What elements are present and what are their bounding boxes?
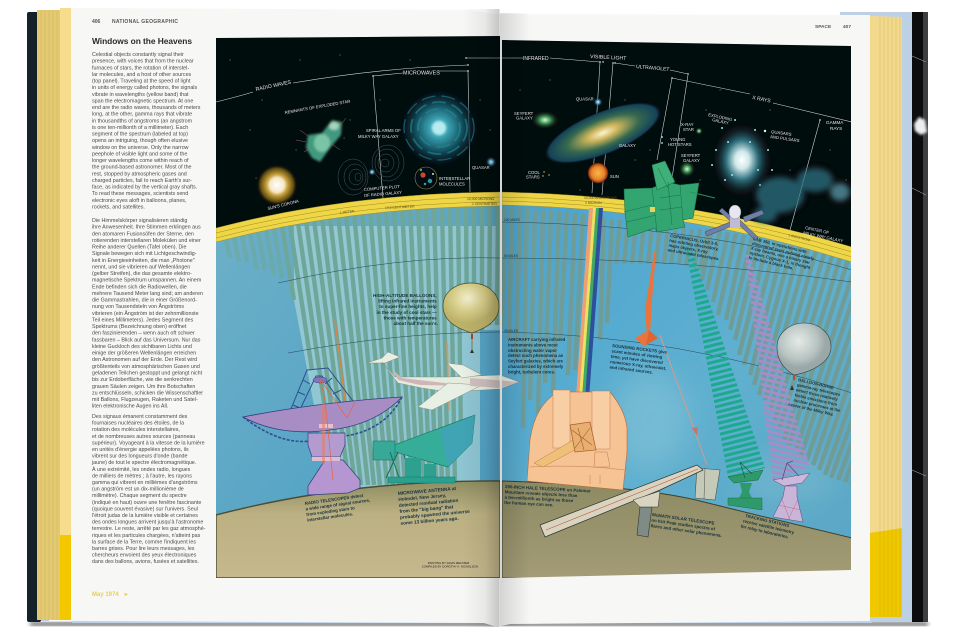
x-ray star — [681, 123, 702, 134]
body text French: terrestre. Le reste, arrêté par les gaz atmosphé- — [92, 526, 206, 532]
atmospheric window shafts — [226, 207, 498, 485]
aircraft caption: obstructing water vapor — [508, 348, 557, 353]
interstellar molecules — [415, 167, 470, 189]
copernicus caption: maps objects, X-ray — [668, 243, 709, 254]
young hot stars: YOUNG — [670, 137, 685, 142]
body text French: Des signaux émanent constamment des — [92, 414, 188, 420]
band scale labels: 10,000 ANGSTROMS — [584, 196, 618, 200]
body text French: des ondes longues arrivent jusqu'à l'astronome — [92, 520, 203, 526]
x-ray star: X-RAY — [681, 122, 694, 127]
hale telescope caption: Mountain reveals objects less than — [505, 489, 578, 498]
band scale labels: 1 CENTIMETER — [472, 202, 497, 206]
body text English: window on the universe. Only the narrow — [91, 145, 189, 151]
body text English: furnaces of stars, the rotation of interstel- — [92, 65, 189, 71]
body text English: rockets, and satellites. — [92, 204, 145, 210]
spectrum name labels: X RAYS — [752, 95, 772, 105]
cool stars: COOL — [528, 170, 541, 175]
body text French: rotation des molécules interstellaires, — [92, 427, 180, 433]
body text English: longer wavelengths come within reach of — [92, 158, 189, 164]
body text English: vibrate in wavelengths (yellow band) that — [92, 92, 189, 98]
body text German: ihre Anwesenheit. Ihre Stimmen erklingen aus — [92, 225, 201, 231]
body text French: (indiqué en haut) ouvre une fenêtre fascinante — [92, 500, 201, 506]
spectrum name labels: MICROWAVES — [403, 70, 440, 76]
quasars and pulsars: QUASARS — [771, 129, 792, 137]
aircraft — [367, 352, 519, 410]
spectrum labels and brackets — [216, 54, 852, 230]
bracket end dots — [373, 58, 820, 120]
sun: SUN — [610, 174, 619, 179]
altitude labels: 25 MILES — [504, 329, 518, 333]
body text English: rest, stopped by atmospheric gases and — [92, 171, 187, 177]
altitude lines — [278, 222, 852, 393]
band scale labels: 1/10 CENTIMETER — [385, 204, 415, 210]
spiral galaxy: SPIRAL ARMS OF — [366, 128, 401, 133]
band scale labels: 1 MICRON — [585, 201, 602, 205]
cool stars — [526, 171, 550, 178]
mcmath caption: McMATH SOLAR TELESCOPE — [652, 512, 715, 526]
body text English: the ground-based astronomer. Most of the — [92, 165, 192, 171]
balloon caption: about half the sun's. — [394, 321, 438, 326]
body text German: nennt, und sie vibrieren auf Wellenlängen — [92, 264, 190, 270]
band scale labels: 1 METER — [340, 209, 355, 215]
body text French: la surface de la Terre, comme l'indiquent les — [92, 539, 196, 545]
hale telescope caption: 200-INCH HALE TELESCOPE on Palomar — [505, 484, 591, 493]
running head right: 407 — [843, 24, 851, 30]
interstellar molecules: INTERSTELLAR — [439, 176, 470, 181]
quasar right — [576, 97, 602, 106]
truss frame — [290, 368, 354, 408]
sounding rockets caption: numerous X-ray, ultraviolet, — [610, 359, 667, 371]
quasar right: QUASAR — [576, 96, 594, 102]
body text English: end are the radio waves, thousands of meters — [92, 105, 201, 111]
radio telescope — [243, 320, 402, 495]
body text French: vibrent sur des longueurs d'onde (bande — [92, 454, 188, 460]
x-ray star: STAR — [683, 127, 694, 132]
body text German: (gelber Streifen), die das gesamte elektro- — [92, 271, 192, 277]
spectrum rainbow shaft — [576, 208, 603, 392]
body text English: face, as indicated by the vertical gray shafts. — [92, 185, 197, 191]
body text German: liten elektronische Augen ins All. — [92, 404, 168, 410]
green tracking station — [728, 462, 763, 510]
body text German: zu entschlüsseln, schicken die Wissenschaftler — [92, 390, 203, 396]
hale telescope caption: the human eye can see. — [504, 500, 554, 507]
body text English: Celestial objects constantly signal their — [92, 52, 184, 58]
spectrum name labels: VISIBLE LIGHT — [590, 54, 627, 62]
hale telescope dome — [527, 390, 627, 490]
balloon caption: lifting infrared instruments — [378, 299, 437, 304]
microwave antenna caption: some 13 billion years ago. — [400, 516, 459, 526]
quasars and pulsars — [764, 130, 800, 142]
balloon-borne caption: feeble emissions from — [794, 392, 838, 407]
interstellar molecules: MOLECULES — [439, 182, 465, 186]
seyfert galaxy left — [514, 111, 558, 128]
microwave antenna caption: probably spawned the universe — [400, 509, 470, 520]
balloon caption: to super-fine heights, help — [379, 304, 437, 309]
body text French: supérieur). Voyageant à la vitesse de la lumière — [92, 440, 205, 446]
green satellite Copernicus — [624, 161, 715, 237]
seyfert galaxy right: SEYFERT — [681, 153, 701, 158]
sounding rockets caption: SOUNDING ROCKETS give — [612, 343, 668, 355]
balloon caption: in the study of cool stars — — [376, 310, 437, 315]
mcmath caption: on Kitt Peak studies spectra of — [651, 518, 716, 532]
painting credit: PAINTING BY DAVIS MELTZER — [428, 561, 469, 565]
balloon caption: HIGH-ALTITUDE BALLOONS, — [373, 293, 437, 298]
body text French: gamma qui vibrent en millièmes d'angströms — [92, 480, 198, 486]
body text German: mit Ballons, Flugzeugen, Raketen und Satel- — [92, 397, 198, 403]
radio telescopes caption: a wide range of signal sources, — [305, 498, 370, 512]
seyfert galaxy right: GALAXY — [683, 158, 700, 163]
body text German: Spektrums (Bezeichnung oben) eröffnet — [92, 324, 187, 330]
aircraft caption: instruments above most — [508, 342, 558, 347]
altitude labels: 50 MILES — [504, 254, 518, 258]
aircraft caption: AIRCRAFT carrying infrared — [508, 337, 566, 342]
body text French: dans des ballons, avions, fusées et satellites. — [92, 559, 199, 565]
lab caption: system, Cygnus X-1, is thought — [749, 250, 812, 270]
band scale labels: 1 ANGSTROM — [788, 233, 810, 242]
exploding galaxy: GALAXY — [712, 117, 729, 126]
tracking stations caption: TRACKING STATIONS — [745, 513, 790, 528]
body text English: peephole of visible light and some of the — [92, 151, 187, 157]
starfield — [230, 55, 846, 190]
left page block edge — [37, 8, 72, 620]
lab caption: to include a black hole. — [748, 255, 794, 271]
radio telescopes caption: RADIO TELESCOPES detect — [304, 493, 364, 506]
sounding rockets caption: scant minutes of viewing — [611, 348, 663, 360]
body text French: et de nombreuses autres sources (panneau — [92, 434, 195, 440]
copernicus caption: COPERNICUS, Orbit 3-5, — [670, 233, 719, 246]
balloon caption: those with temperatures — [384, 315, 437, 320]
body text German: geladenen Teilchen gestoppt und gelangt nicht — [92, 370, 203, 376]
gutter shading — [462, 9, 530, 627]
body text German: Reihe anderer Quellen (Tafel oben). Die — [92, 245, 186, 251]
body text German: den Astronomen auf der Erde. Der Rest wird — [92, 357, 197, 363]
tracking stations caption: for relay to laboratories. — [740, 524, 789, 540]
body text German: den atomaren Fusionsöfen der Sterne, den — [92, 231, 194, 237]
body text German: Ende befinden sich die Radiowellen, die — [92, 284, 187, 290]
radio telescopes caption: from exploding stars to — [306, 505, 355, 517]
body text French: À une extrémité, les ondes radio, longues — [92, 466, 191, 473]
seyfert galaxy left: GALAXY — [516, 116, 533, 120]
exploding galaxy: EXPLODING — [708, 112, 733, 122]
body text German: vibrieren (ein Ångström ist der zehnmillionste — [92, 310, 199, 317]
center of milky way galaxy: CENTER OF — [805, 225, 830, 235]
computer plot of radio galaxy — [338, 145, 404, 198]
seyfert galaxy right — [679, 154, 700, 177]
band scale labels — [340, 196, 810, 242]
balloon-borne caption: center of the Milky Way. — [788, 402, 834, 417]
atmosphere sky — [216, 199, 852, 560]
folio date: May 1974 ▸ — [92, 592, 129, 598]
purple tracking station — [773, 461, 810, 522]
body text English: lar molecules, and a host of other sources — [92, 72, 192, 78]
andromeda type galaxy — [545, 102, 662, 164]
spectrum name labels: GAMMA — [826, 120, 844, 125]
exploded star remnant — [284, 99, 351, 162]
body text German: Teil eines Millimeters). Jedes Segment des — [92, 317, 194, 323]
young hot stars: HOT STARS — [668, 142, 692, 147]
body text English: in thousandths of angstroms (an angstrom — [92, 118, 193, 124]
cool stars: STARS — [526, 174, 540, 180]
body text German: bis zur Erdoberfläche, wie die senkrechten — [92, 377, 193, 383]
radio telescopes caption: interstellar molecules. — [307, 511, 353, 523]
exploding galaxy — [708, 112, 774, 200]
sun — [587, 162, 619, 184]
solar arrow — [660, 335, 707, 465]
running head left: NATIONAL GEOGRAPHIC — [112, 19, 178, 25]
mcmath solar telescope — [540, 465, 720, 537]
microwave horn antenna — [373, 415, 475, 483]
painting credit: COMPILED BY DOROTHY A. NICHOLSON — [422, 564, 478, 568]
quasars and pulsars: AND PULSARS — [770, 134, 800, 143]
aircraft caption: characterized by extremely — [508, 364, 564, 369]
body text English: span the electromagnetic spectrum. At one — [92, 98, 193, 104]
ground — [216, 481, 852, 578]
body text English: electronic eyes aloft in balloons, planes, — [92, 198, 186, 204]
body text French: jaune) de tout le spectre électromagnétique. — [91, 460, 196, 466]
body text English: is one ten-millionth of a millimeter). Each — [92, 125, 188, 131]
lab caption: discovered stars pulsing clearly — [752, 241, 815, 261]
copernicus caption: has orbiting observatory, — [669, 238, 719, 251]
body text English: opens an intriguing, though often elusive — [92, 138, 188, 144]
balloon-borne caption: gamma-ray telescopes — [797, 382, 841, 397]
body text German: fassbaren – Blick auf das Universum. Nur das — [92, 337, 201, 343]
body text German: grauen Säulen zeigen. Um ihre Botschaften — [92, 384, 195, 390]
high-altitude balloon — [373, 283, 499, 410]
spiral galaxy — [358, 90, 476, 166]
quasar left: QUASAR — [472, 165, 490, 170]
microwave antenna caption: detected residual radiation — [399, 498, 459, 508]
body text German: nung von Tausendsteln von Ångströms — [92, 303, 184, 310]
body text French: millimètre). Chaque segment du spectre — [92, 493, 187, 499]
body text French: (quoique souvent évasive) sur l'univers. Seul — [92, 506, 198, 512]
body text French: (un angström est un dix-millionième de — [92, 487, 184, 493]
sounding rockets caption: time, yet have discovered — [611, 354, 663, 365]
body text German: rotierenden interstellaren Molekülen und einer — [92, 238, 201, 244]
arrowhead — [692, 427, 698, 436]
body text English: To read these messages, scientists send — [92, 191, 188, 197]
body text German: größtenteils von atmosphärischen Gasen und — [92, 364, 200, 370]
running head right: SPACE — [815, 25, 831, 30]
cover artwork fragment — [912, 56, 926, 476]
body text French: riques et les particules chargées, n'atteint pas — [92, 533, 201, 539]
copernicus caption: and ultraviolet telescopes. — [667, 247, 720, 261]
spectrum name labels: RADIO WAVES — [255, 79, 292, 93]
lab caption: LAB 350, in operations with — [753, 236, 808, 254]
center of milky way galaxy — [753, 168, 850, 243]
right page block edge — [870, 16, 902, 617]
body text French: fournaises nucléaires des étoiles, de la — [92, 421, 184, 427]
computer plot of radio galaxy: COMPUTER PLOT — [364, 184, 400, 192]
balloon-borne caption: nuclear processes at the — [793, 397, 842, 413]
body text German: magnetische Spektrum umspannen. An einem — [92, 278, 202, 284]
exploded star remnant: REMNANTS OF EXPLODED STAR — [284, 99, 351, 115]
microwave antenna caption: from the "big bang" that — [399, 504, 454, 514]
body text German: kleine Guckloch des sichtbaren Lichts und — [92, 344, 192, 350]
hale telescope caption: a ten-millionth as bright as those — [504, 495, 574, 503]
young hot stars — [662, 137, 692, 147]
teal telemetry beam — [686, 250, 765, 477]
andromeda type galaxy: GALAXY — [619, 143, 636, 148]
microwave antenna caption: MICROWAVE ANTENNA at — [398, 486, 457, 496]
tracking stations caption: receive satellite telemetry — [743, 518, 795, 535]
body text English: presence, with voices that from the nuclear — [92, 59, 194, 65]
altitude labels: 100 MILES — [504, 218, 520, 222]
body text English: charged particles, fail to reach Earth's sur- — [92, 178, 192, 184]
body text English: long, at the other, gamma rays that vibrate — [92, 112, 192, 118]
spectrum name labels: ULTRAVIOLET — [636, 64, 670, 73]
drop shadow under book — [30, 622, 928, 626]
body text English: segment of the spectrum (labeled at top) — [92, 132, 188, 138]
rocket — [635, 252, 658, 346]
body text French: de milliers de mètres ; à l'autre, les rayons — [92, 473, 192, 479]
body text English: (top panel). Traveling at the speed of light — [92, 79, 191, 85]
center of milky way galaxy: MILKY WAY GALAXY — [803, 230, 844, 243]
sounding rockets caption: and infrared sources. — [609, 364, 653, 375]
light gaps between atmospheric shafts — [294, 226, 500, 490]
body text French: l'étroit judas de la lumière visible et certaines — [92, 513, 198, 519]
body text French: chercheurs envoient des yeux électroniques — [92, 553, 197, 559]
mcmath caption: flares and other solar phenomena. — [650, 523, 722, 538]
spectrum name labels — [255, 54, 844, 131]
spectrum name labels: INFRARED — [523, 56, 549, 62]
spiral galaxy: MILKY WAY GALAXY — [358, 134, 399, 139]
body text German: Signale bewegen sich mit Lichtgeschwindig- — [92, 251, 197, 257]
balloon-borne caption: detect these relatively — [795, 387, 839, 402]
quasar left — [472, 156, 497, 170]
skylab satellite — [705, 205, 764, 240]
sun's corona — [256, 164, 299, 211]
illustration — [216, 36, 851, 578]
spectrum name labels: RAYS — [830, 126, 842, 131]
body text English: in units of energy called photons, the signals — [92, 85, 197, 91]
body text German: mehrere Tausend Meter lang sind; am anderen — [92, 291, 203, 297]
running head left: 406 — [92, 19, 101, 25]
heading: Windows on the Heavens — [92, 36, 192, 46]
balloon-borne caption: BALLOON-BORNE — [798, 377, 835, 390]
body text German: Die Himmelskörper signalisieren ständig — [92, 218, 187, 224]
wavelength band — [216, 192, 852, 262]
purple gamma beam — [745, 255, 810, 482]
aircraft caption: bright, turbulent cores. — [508, 369, 555, 374]
body text German: die Gammastrahlen, die in einer Größenord- — [92, 298, 197, 304]
lab caption: X-ray beams, one a binary star — [750, 245, 811, 265]
computer plot of radio galaxy: OF RADIO GALAXY — [364, 190, 402, 198]
body text German: den faszinierenden – wenn auch oft schwer — [92, 331, 195, 337]
right balloon — [777, 323, 847, 418]
body text German: einige der größeren Wellenlängen erreichen — [92, 351, 196, 357]
microwave antenna caption: Holmdel, New Jersey, — [398, 493, 446, 502]
sun's corona: SUN'S CORONA — [267, 198, 299, 211]
body text German: keit in Energieeinheiten, die man „Photone" — [92, 258, 195, 264]
seyfert galaxy left: SEYFERT — [514, 111, 534, 116]
aircraft caption: Seyfert galaxies, which are — [508, 359, 564, 364]
body text French: barres grises. Pour lire leurs messages, les — [92, 546, 195, 552]
band scale labels: 10,000 MICRONS — [467, 197, 495, 201]
aircraft caption: detect such phenomena as — [508, 353, 564, 358]
body text French: en unités d'énergie appelées photons, ils — [92, 447, 189, 453]
space background — [216, 36, 851, 247]
